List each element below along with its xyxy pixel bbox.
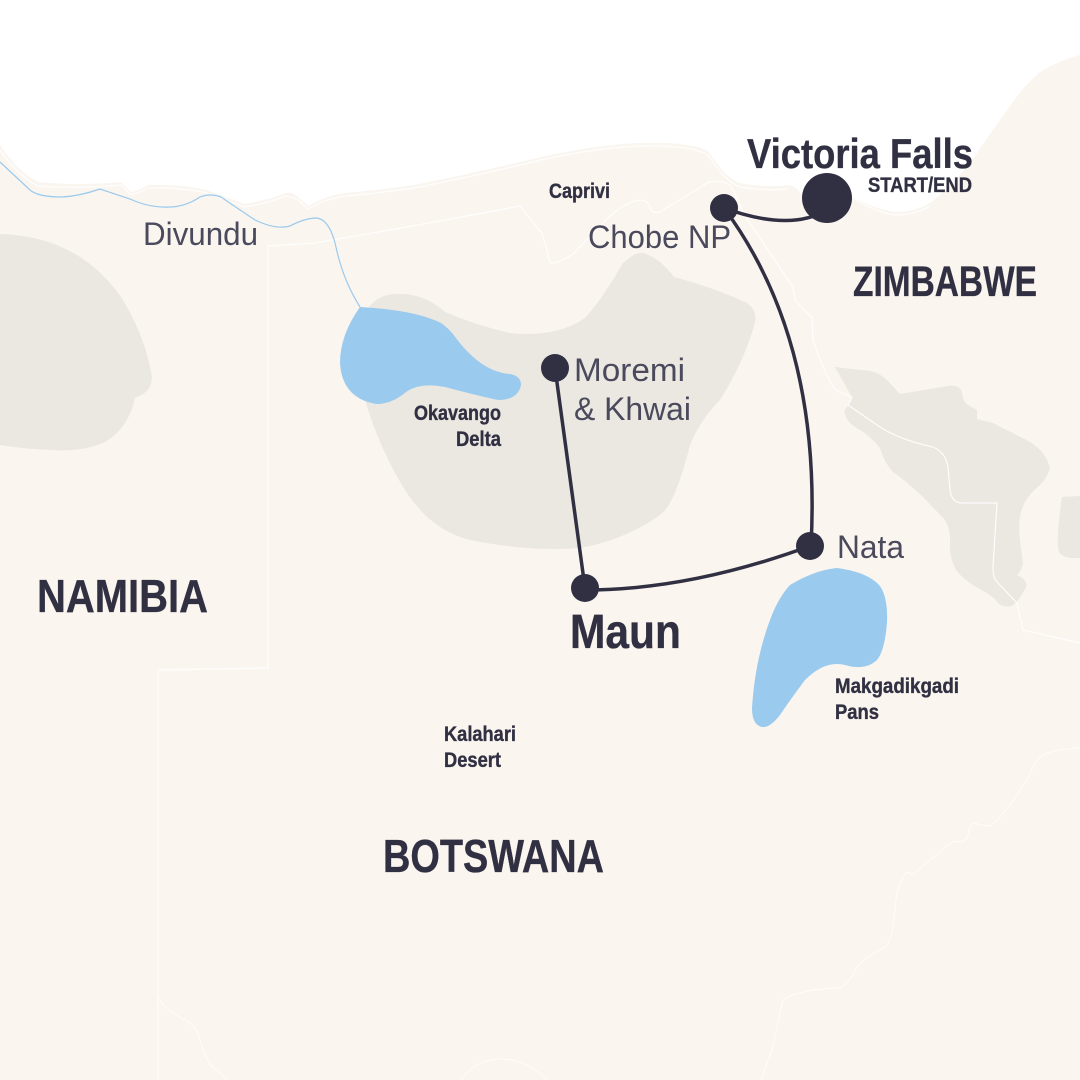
heading: Victoria Falls: Victoria Falls — [747, 130, 973, 177]
region: eastern highland — [835, 367, 1050, 607]
label: Okavango Delta: Okavango — [414, 402, 501, 425]
label: Makgadikgadi Pans — [835, 675, 959, 724]
route line — [555, 208, 827, 590]
label: Moremi and Khwai: Moremi — [574, 352, 685, 388]
stop: Nata — [796, 532, 824, 560]
label: Moremi and Khwai — [574, 352, 691, 427]
heading: Maun: Maun — [570, 606, 681, 659]
label: Okavango Delta — [414, 402, 501, 451]
country: Botswana: BOTSWANA — [383, 830, 604, 882]
stop: Moremi and Khwai — [541, 354, 569, 382]
stop: Victoria Falls — [802, 173, 852, 223]
label: Kalahari Desert: Desert — [444, 749, 501, 772]
label: start/end: START/END — [868, 174, 972, 197]
region: Okavango and Moremi plain — [365, 253, 755, 549]
label: Nata: Nata — [837, 529, 904, 565]
stop: Chobe NP — [710, 194, 738, 222]
stop: Maun — [571, 574, 599, 602]
label: Makgadikgadi Pans: Makgadikgadi — [835, 675, 959, 698]
label: Kalahari Desert: Kalahari — [444, 723, 516, 746]
country: Namibia: NAMIBIA — [37, 570, 208, 622]
label: Makgadikgadi Pans: Pans — [835, 701, 879, 724]
label: Okavango Delta: Delta — [456, 428, 501, 451]
lake: Okavango Delta — [340, 307, 521, 404]
river: Okavango — [0, 162, 360, 307]
faint southern borders — [158, 748, 1080, 1080]
label: Moremi and Khwai: & Khwai — [574, 391, 691, 427]
region: far-east highland — [1058, 496, 1080, 558]
label: Kalahari Desert — [444, 723, 516, 772]
label: Divundu: Divundu — [143, 216, 258, 252]
label: Caprivi: Caprivi — [549, 180, 610, 203]
region: western highland — [0, 234, 152, 450]
label: Chobe NP: Chobe NP — [588, 219, 731, 255]
lake: Makgadikgadi Pans — [752, 568, 887, 727]
